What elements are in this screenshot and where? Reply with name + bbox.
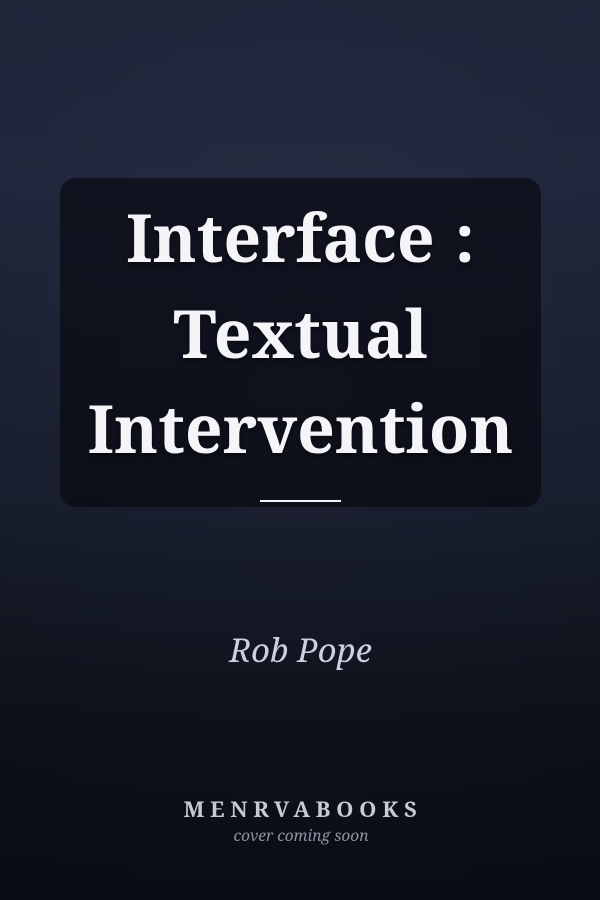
panel: title backdrop (60, 178, 541, 507)
tagline: cover coming soon (234, 824, 368, 846)
title: Interface : (126, 192, 475, 282)
title: Intervention (88, 383, 513, 473)
publisher: MENRVABOOKS (183, 794, 423, 824)
title: Textual (173, 288, 428, 378)
title (88, 192, 513, 473)
accent rule (260, 500, 341, 502)
author: Rob Pope (229, 627, 372, 672)
